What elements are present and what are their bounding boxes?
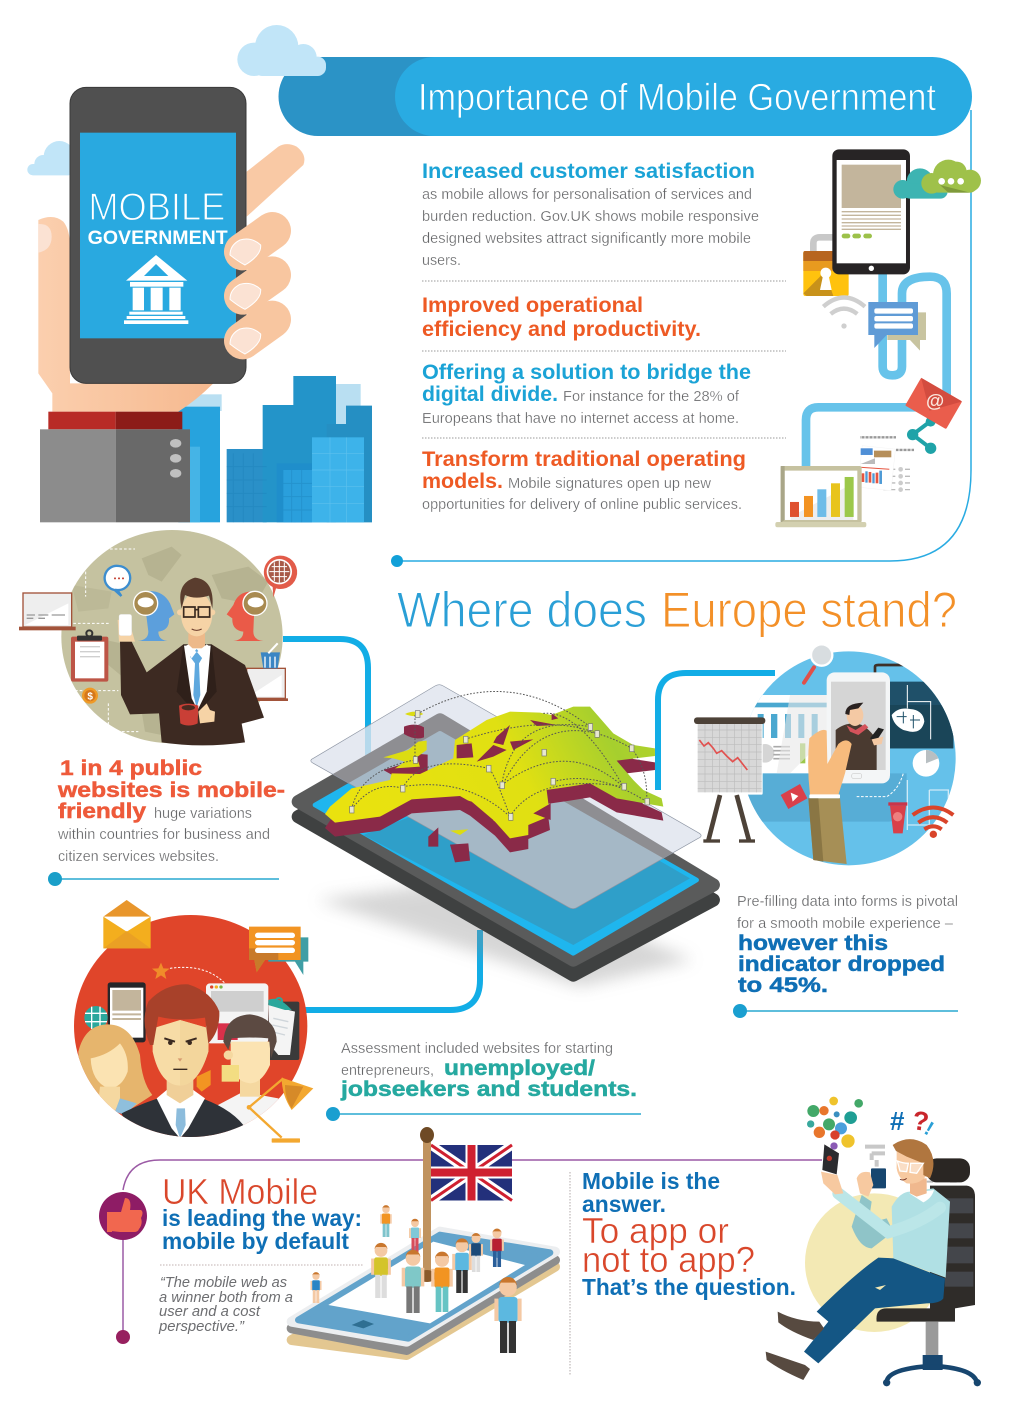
illustration: tablet with Europe map: [298, 685, 713, 987]
icon: thumbs up: [99, 1192, 147, 1240]
text: mobile-friendly statistic: [48, 757, 285, 886]
heading: Where does Europe stand: Where does: [397, 582, 647, 638]
benefit 2: [422, 293, 701, 341]
man in center: [122, 984, 243, 1140]
shirt cuff: [48, 412, 182, 429]
text: to app or not: answer.: [582, 1191, 666, 1217]
phone with man on screen: [827, 672, 890, 783]
world map pattern: [72, 547, 268, 735]
hand palm: [38, 217, 213, 412]
text: assessment: unemployed/: [444, 1057, 595, 1080]
benefit 4: Mobile signatures open up new: [508, 476, 712, 492]
illustration: hand, phone, clouds and city: [27, 25, 372, 522]
woman on left: [78, 1024, 152, 1115]
icon: globe: [84, 1006, 108, 1029]
text: to app or not: Mobile is the: [582, 1168, 720, 1194]
text: UK Mobile: UK Mobile: [162, 1171, 318, 1212]
benefit 3: Offering a solution to bridge the: [422, 360, 751, 384]
icon: video: [781, 784, 807, 809]
text: UK Mobile: is leading the way:: [162, 1205, 362, 1231]
background dashboard: [890, 682, 953, 748]
decorative connector lines: [283, 639, 775, 1010]
flagpole: [418, 1127, 436, 1282]
benefit 3: [422, 360, 751, 427]
benefit 3: For instance for the 28% of: [563, 389, 740, 405]
icon: laptop right and basket: [247, 643, 288, 701]
text: pre-filling data: Pre-filling data into forms is pivotal: [737, 894, 958, 910]
icon: clouds: [893, 160, 981, 199]
shoes: [766, 1312, 824, 1380]
illustration: UK phone with people: [292, 1127, 555, 1355]
icon cluster: digital services: [775, 149, 981, 527]
text: assessment: [326, 1041, 641, 1121]
text: assessment: entrepreneurs,: [341, 1063, 434, 1079]
suit: [120, 642, 264, 745]
text: pre-filling data: for a smooth mobile experience –: [737, 916, 954, 932]
text: to app or not: not to app?: [582, 1239, 755, 1280]
head: [893, 1139, 933, 1197]
glasses: [184, 607, 210, 617]
phone: GOVERNMENT: [88, 228, 228, 249]
illustration: man in office chair: [766, 1097, 981, 1386]
phone and hand: [821, 1144, 843, 1194]
icon: cup: [888, 802, 907, 833]
post-it and box: [222, 1065, 239, 1082]
presentation easel: [694, 717, 765, 843]
cloud: left: [27, 141, 75, 175]
icon: chat bubbles: [868, 302, 926, 351]
tablet screen: [315, 733, 697, 953]
quote: perspective.”: [158, 1318, 245, 1335]
text: to app or not: That’s the question.: [582, 1274, 796, 1300]
text: to app or not: [582, 1168, 796, 1300]
benefit 1: Increased customer satisfaction: [422, 159, 755, 183]
benefit 2: Improved operational: [422, 293, 643, 317]
question symbols: [890, 1105, 937, 1140]
dashed arrows: [73, 549, 138, 732]
illustration: businessman circle: [19, 530, 297, 745]
envelope: [103, 900, 151, 948]
phone: [292, 1232, 555, 1355]
cloud: top: [237, 25, 326, 76]
benefit 2: efficiency and productivity.: [422, 317, 701, 341]
man on right: [218, 1014, 278, 1131]
question symbols: !: [920, 1118, 937, 1140]
benefit 4: models.: [422, 469, 503, 493]
text: assessment: Assessment included websites for starting: [341, 1041, 613, 1057]
thumb nail: [38, 224, 52, 253]
icon: laptop with bar chart: [775, 466, 866, 527]
phone label: MOBILE: [88, 186, 225, 229]
businessman: [118, 578, 264, 745]
map route lines: [352, 691, 647, 817]
benefit 1: designed websites attract significantly more mobile: [422, 231, 751, 247]
buildings: [178, 376, 372, 522]
flag: [431, 1145, 512, 1200]
background laptop: [740, 773, 907, 822]
heading: Where does Europe stand: Europe stand?: [661, 582, 957, 638]
Europe map: [325, 691, 663, 862]
app icons cluster: [807, 1097, 863, 1150]
map extrusion: [325, 721, 663, 862]
icon: coin: [82, 688, 98, 704]
benefit 4: Transform traditional operating: [422, 447, 746, 471]
icon: magnifier: [804, 644, 832, 683]
icon: report sheets: [858, 437, 915, 492]
text: mobile-friendly statistic: friendly: [58, 800, 146, 823]
quote: a winner both from a: [159, 1289, 293, 1306]
quote: “The mobile web as: [160, 1274, 287, 1291]
finger nails: [230, 239, 261, 354]
question symbols: ?: [911, 1105, 931, 1137]
icon: laptop left: [19, 593, 76, 630]
text: assessment: jobseekers and students.: [340, 1078, 637, 1101]
icon: speech bubble: [105, 566, 130, 596]
icon: globe: [264, 556, 297, 598]
jacket sleeve: [40, 429, 190, 522]
front arm: [838, 1193, 940, 1232]
steam: [865, 1147, 885, 1167]
text: UK Mobile: mobile by default: [162, 1228, 349, 1254]
benefit 1: [422, 159, 759, 269]
coffee mug: [179, 704, 198, 725]
head icon: red: [227, 591, 267, 641]
phone: [70, 87, 246, 383]
header banner: [279, 57, 972, 136]
benefit 4: opportunities for delivery of online public services.: [422, 497, 742, 513]
head icon: blue: [134, 591, 174, 641]
section: benefits text: [422, 159, 786, 513]
coffee mug and hand: [857, 1168, 886, 1197]
shadow: [317, 877, 693, 987]
vertical divider: [569, 1172, 571, 1375]
icon: coin: $: [87, 691, 93, 702]
benefit 1: users.: [422, 253, 461, 269]
fingers: [243, 231, 272, 341]
benefit 4: [422, 447, 746, 513]
icon: tablet: [108, 982, 146, 1042]
benefit 3: Europeans that have no internet access at home.: [422, 411, 739, 427]
quote: [158, 1274, 293, 1335]
icon: wifi red: [913, 807, 953, 838]
text: mobile-friendly statistic: 1 in 4 public: [60, 757, 202, 780]
clipboard: [268, 998, 299, 1060]
chat bubbles: [249, 927, 308, 975]
illustration: forms on mobile circle: [694, 644, 956, 865]
text: mobile-friendly statistic: huge variations: [154, 806, 252, 822]
sweater: [892, 1188, 950, 1278]
heading: Where does Europe stand: [397, 582, 957, 638]
raised hand and phone: [118, 618, 135, 642]
text: mobile-friendly statistic: within countries for business and: [57, 827, 270, 843]
desk lamp: [247, 1078, 313, 1143]
legs: [804, 1258, 945, 1363]
back arm: [852, 1195, 893, 1248]
question symbols: #: [890, 1106, 905, 1136]
icon: government building: [124, 255, 188, 324]
text: to app or not: To app or: [582, 1210, 729, 1251]
top finger: [247, 144, 304, 217]
icon: star: [152, 963, 170, 979]
title: Importance of Mobile Government: [418, 77, 936, 119]
benefit 1: burden reduction. Gov.UK shows mobile responsive: [422, 209, 759, 225]
icon: brain: [892, 685, 931, 739]
browser window: [206, 983, 268, 1043]
icon: tablet: [832, 149, 910, 274]
map markers: [350, 711, 649, 820]
icon: email envelope: @: [926, 390, 944, 411]
illustration: citizens circle: [74, 900, 313, 1143]
icon: wifi: [823, 297, 865, 329]
pie: [913, 750, 939, 777]
outline connecting header to Europe section: [391, 110, 971, 567]
tablet body: [298, 720, 713, 975]
benefit 3: digital divide.: [422, 382, 558, 406]
text: UK Mobile: [158, 1171, 363, 1335]
chair: [876, 1158, 981, 1386]
icon: padlock: [803, 237, 849, 296]
text: pre-filling data: [733, 894, 958, 1018]
quote: user and a cost: [159, 1303, 261, 1320]
benefit 1: as mobile allows for personalisation of services and: [422, 187, 752, 203]
icon: clipboard: [71, 630, 108, 682]
text: pre-filling data: to 45%.: [738, 974, 828, 997]
text: pre-filling data: however this: [738, 932, 888, 955]
text: mobile-friendly statistic: websites is mobile-: [57, 779, 285, 802]
head: [181, 592, 212, 636]
hand holding phone: [808, 730, 852, 864]
text: mobile-friendly statistic: citizen services websites.: [58, 849, 219, 865]
text: pre-filling data: indicator dropped: [738, 953, 945, 976]
purple timeline: [116, 1160, 822, 1344]
icon: share nodes: [907, 417, 936, 454]
people: [310, 1205, 522, 1353]
glass overlay: [310, 684, 702, 909]
icon: email envelope: [905, 377, 963, 429]
